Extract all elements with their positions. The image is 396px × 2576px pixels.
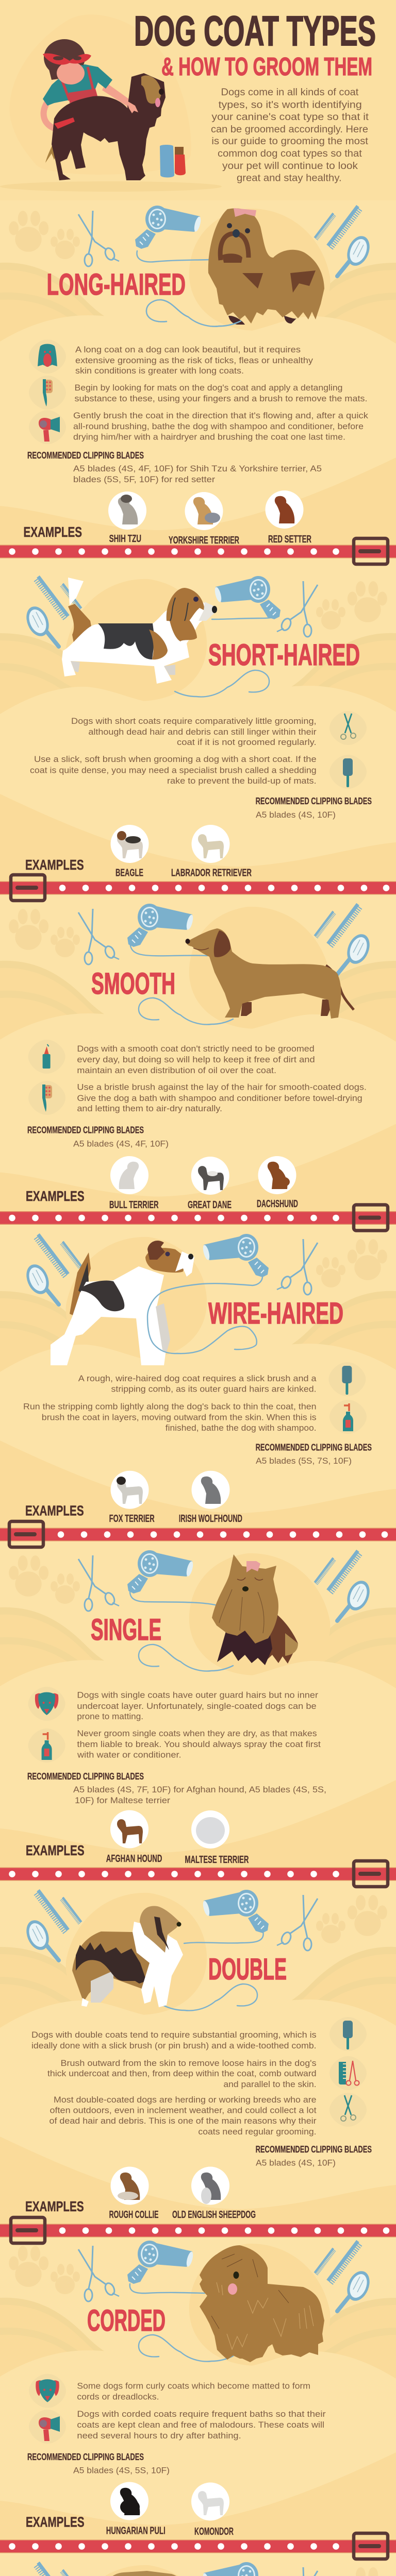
text: long-haired intro: A long coat on a dog can look beautiful, but it requires <box>75 345 301 354</box>
text: corded coat: Some dogs form curly coats which become matted to form <box>77 2381 310 2391</box>
text: single coat: prone to matting. <box>77 1711 143 1721</box>
icon: hairdryer <box>29 410 66 444</box>
text: wire-haired combing: A rough, wire-haired dog coat requires a slick brush and a <box>78 1374 317 1383</box>
clipping blades: single: RECOMMENDED CLIPPING BLADES <box>27 1771 144 1782</box>
text: smooth coat: maintain an even distribution of oil over the coat. <box>77 1065 276 1075</box>
clipping blades: smooth <box>27 1124 169 1149</box>
text: detangling: Begin by looking for mats on the dog's coat and apply a detangling <box>74 383 342 393</box>
panel: corded background <box>0 2244 396 2540</box>
intro text: your pet will continue to look <box>222 161 358 172</box>
intro text: types, so it's worth identifying <box>219 100 362 111</box>
text: long-haired intro: skin conditions is greater with long coats. <box>75 366 244 376</box>
text: smooth coat <box>77 1044 315 1075</box>
dog illustration: corded <box>200 2245 324 2362</box>
tools: single <box>9 1550 374 1671</box>
examples: long-haired: SHIH TZU <box>109 533 141 545</box>
text: short coat grooming: coat if it is not groomed regularly. <box>177 737 317 747</box>
header panel <box>0 0 396 200</box>
text: double coat: Dogs with double coats tend to require substantial grooming, which is <box>31 2030 317 2040</box>
text: long-haired intro <box>75 345 314 376</box>
text: brush outward: and parallel to the skin. <box>223 2079 317 2089</box>
examples: smooth: BULL TERRIER <box>109 1199 159 1211</box>
panel: woolly background <box>0 2565 396 2576</box>
intro text: Dogs come in all kinds of coat <box>221 87 359 98</box>
examples: wire-haired <box>25 1471 242 1524</box>
panel: single background <box>0 1553 396 1868</box>
text: smooth coat: every day, but doing so will help to keep it free of dirt and <box>77 1055 315 1064</box>
clipping blades: long-haired <box>27 450 322 484</box>
panel: short-haired background <box>0 579 396 882</box>
text: wire-haired combing: stripping comb, as its outer guard hairs are kinked. <box>111 1384 317 1394</box>
intro text: common dog coat types so that <box>218 148 362 159</box>
clipping blades: single: 10F) for Maltese terrier <box>75 1795 170 1805</box>
dryer cord <box>137 251 209 262</box>
lower cord: long-haired <box>146 300 241 327</box>
intro text <box>211 87 369 184</box>
text: brush outward <box>47 2058 317 2089</box>
text: brushing and drying <box>73 411 369 442</box>
tools: woolly <box>22 2562 387 2576</box>
examples: corded <box>26 2482 234 2537</box>
examples: double: OLD ENGLISH SHEEPDOG <box>172 2209 256 2221</box>
dog illustration: double collie <box>72 1906 183 2007</box>
icon: comb and scissors <box>329 2056 367 2090</box>
examples: single: AFGHAN HOUND <box>106 1853 162 1865</box>
text: frequent baths: need several hours to dry after bathing. <box>77 2431 241 2441</box>
text: spray first <box>77 1728 321 1760</box>
icon: spray bottle <box>28 1728 65 1762</box>
clipping blades: single <box>27 1771 326 1805</box>
examples: double: EXAMPLES <box>25 2198 84 2214</box>
text: working breeds: often outdoors, even in inclement weather, and could collect a lot <box>50 2105 317 2115</box>
clipping blades: smooth: A5 blades (4S, 4F, 10F) <box>73 1139 169 1149</box>
text: single coat <box>77 1690 318 1721</box>
text: working breeds: of dead hair and debris. This is one of the main reasons why their <box>50 2116 317 2126</box>
dryer cord <box>130 1591 217 1605</box>
tools: double <box>22 1890 387 2011</box>
text: short coat grooming: Dogs with short coats require comparatively little grooming, <box>71 716 317 726</box>
examples: wire-haired: IRISH WOLFHOUND <box>179 1513 242 1524</box>
icon: bristle brush <box>29 376 66 410</box>
icon: bristle brush <box>28 1081 65 1115</box>
icon: dog face <box>29 2374 66 2408</box>
text: corded coat: cords or dreadlocks. <box>77 2392 159 2402</box>
text: spray first: Never groom single coats when they are dry, as that makes <box>77 1728 317 1738</box>
clipping blades: double: A5 blades (4S, 10F) <box>256 2158 336 2168</box>
examples: single: EXAMPLES <box>26 1842 85 1858</box>
text: frequent baths: Dogs with corded coats require frequent baths so that their <box>77 2409 326 2419</box>
text: long-haired intro: extensive grooming as the risk of ticks, fleas or unhealthy <box>75 355 314 365</box>
examples: long-haired <box>24 490 311 546</box>
text: frequent baths <box>77 2409 326 2441</box>
examples: double <box>25 2167 256 2221</box>
text: brush outward: Brush outward from the skin to remove loose hairs in the dog's <box>61 2058 317 2068</box>
text: slick brush <box>30 754 317 786</box>
heading: long-haired: LONG-HAIRED <box>47 268 186 301</box>
clipping blades: smooth: RECOMMENDED CLIPPING BLADES <box>27 1124 144 1135</box>
text: brushing and drying: Gently brush the coat in the direction that it's flowing and, after a quick <box>73 411 369 420</box>
examples: long-haired: EXAMPLES <box>24 524 82 540</box>
examples: smooth: GREAT DANE <box>188 1199 232 1211</box>
examples: short-haired: BEAGLE <box>116 868 143 879</box>
clipping blades: short-haired: A5 blades (4S, 10F) <box>256 810 336 820</box>
examples: short-haired: LABRADOR RETRIEVER <box>171 868 252 879</box>
collar divider 1 <box>0 538 396 564</box>
text: bristle brush: and letting them to air-dry naturally. <box>77 1104 222 1113</box>
examples: smooth: DACHSHUND <box>257 1198 298 1210</box>
intro text: is our guide to grooming the most <box>211 136 369 147</box>
clipping blades: long-haired: A5 blades (4S, 4F, 10F) for Shih Tzu & Yorkshire terrier, A5 <box>73 464 322 473</box>
examples: wire-haired: EXAMPLES <box>25 1503 84 1519</box>
text: short coat grooming: although dead hair and debris can still linger within their <box>88 727 317 737</box>
text: stripping comb: brush the coat in layers, moving outward from the skin. When this is <box>42 1413 317 1422</box>
icon: scissors <box>329 711 367 745</box>
examples: long-haired: RED SETTER <box>268 534 311 545</box>
text: detangling: substance to these, using your fingers and a brush to remove the mats. <box>74 394 367 403</box>
examples: long-haired: YORKSHIRE TERRIER <box>169 535 239 546</box>
collar divider 7 <box>0 2533 396 2559</box>
examples: short-haired: EXAMPLES <box>25 857 84 873</box>
icon: dog face <box>28 1687 65 1721</box>
panel: long-haired background <box>0 209 396 546</box>
text: bristle brush <box>77 1082 367 1113</box>
examples: smooth: EXAMPLES <box>26 1188 85 1204</box>
icon: slick brush <box>328 1362 366 1396</box>
dryer cord <box>130 941 207 956</box>
icon: shampoo bottle <box>28 1040 65 1074</box>
intro text: can be groomed accordingly. Here <box>211 124 368 135</box>
examples: corded: KOMONDOR <box>194 2526 234 2537</box>
text: single coat: undercoat layer. Unfortunately, single-coated dogs can be <box>77 1701 317 1711</box>
tools: short-haired <box>22 576 387 697</box>
dog illustration: smooth dachshund <box>186 928 354 1019</box>
panel: smooth background <box>0 907 396 1212</box>
examples: smooth <box>26 1156 298 1211</box>
text: corded coat <box>77 2381 310 2402</box>
text: spray first: them liable to break. You should always spray the coat first <box>77 1739 321 1749</box>
collar divider 5 <box>0 1861 396 1887</box>
clipping blades: corded: RECOMMENDED CLIPPING BLADES <box>27 2451 144 2462</box>
text: double coat <box>31 2030 317 2050</box>
examples: single <box>26 1810 249 1866</box>
text: short coat grooming <box>71 716 317 747</box>
dog illustration: wire-haired fox terrier <box>51 1241 194 1365</box>
text: working breeds: coats need regular grooming. <box>198 2127 317 2137</box>
intro text: great and stay healthy. <box>237 173 342 184</box>
icon: long hair face <box>29 340 66 374</box>
intro text: your canine's coat type so that it <box>211 112 369 123</box>
collar divider 3 <box>0 1205 396 1230</box>
clipping blades: long-haired: RECOMMENDED CLIPPING BLADES <box>27 450 144 461</box>
text: stripping comb: finished, bathe the dog with shampoo. <box>166 1423 317 1433</box>
clipping blades: wire-haired <box>256 1442 372 1466</box>
text: smooth coat: Dogs with a smooth coat don't strictly need to be groomed <box>77 1044 315 1054</box>
examples: corded: HUNGARIAN PULI <box>106 2526 166 2537</box>
tools: long-haired <box>9 206 374 327</box>
dryer cord <box>212 609 278 619</box>
icon: slick brush <box>329 2017 367 2051</box>
header illustration: groomer and dog <box>43 39 186 180</box>
text: working breeds: Most double-coated dogs are herding or working breeds who are <box>54 2095 317 2105</box>
icon: hairdryer <box>29 2410 66 2444</box>
clipping blades: single: A5 blades (4S, 7F, 10F) for Afghan hound, A5 blades (4S, 5S, <box>73 1785 326 1794</box>
clipping blades: long-haired: blades (5S, 5F, 10F) for red setter <box>73 474 215 484</box>
clipping blades: corded <box>27 2451 170 2475</box>
text: frequent baths: coats are kept clean and free of malodours. These coats will <box>77 2420 324 2430</box>
heading: single: SINGLE <box>91 1613 161 1647</box>
examples: corded: EXAMPLES <box>26 2514 85 2530</box>
text: brushing and drying: all-round brushing, bathe the dog with shampoo and conditioner, before <box>73 421 364 431</box>
tools: wire-haired <box>22 1234 387 1304</box>
clipping blades: double <box>256 2144 372 2168</box>
heading: double: DOUBLE <box>208 1953 287 1986</box>
dog illustration: single yorkie <box>212 1554 298 1665</box>
dryer cord <box>130 2284 205 2293</box>
icon: slick brush <box>329 755 367 789</box>
text: working breeds <box>50 2095 317 2137</box>
dryer cord <box>184 1931 263 1943</box>
text: slick brush: rake to prevent the build-up of mats. <box>167 776 317 786</box>
examples: short-haired <box>25 825 252 879</box>
clipping blades: short-haired <box>256 795 372 820</box>
examples: wire-haired: FOX TERRIER <box>109 1513 155 1524</box>
text: bristle brush: Use a bristle brush against the lay of the hair for smooth-coated dogs. <box>77 1082 367 1092</box>
dog illustration: short-haired beagle <box>62 578 217 684</box>
text: stripping comb: Run the stripping comb lightly along the dog's back to thin the coat, then <box>23 1401 317 1412</box>
clipping blades: corded: A5 blades (4S, 5S, 10F) <box>73 2465 170 2475</box>
text: spray first: with water or conditioner. <box>77 1750 182 1760</box>
clipping blades: wire-haired: A5 blades (5S, 7S, 10F) <box>256 1456 352 1466</box>
heading: smooth: SMOOTH <box>91 967 175 1001</box>
collar divider 6 <box>0 2217 396 2243</box>
text: detangling <box>74 383 367 403</box>
tools: corded <box>9 2241 374 2362</box>
tools: smooth <box>9 904 374 1025</box>
text: bristle brush: Give the dog a bath with shampoo and conditioner before towel-drying <box>77 1093 362 1103</box>
text: single coat: Dogs with single coats have outer guard hairs but no inner <box>77 1690 318 1700</box>
panel: wire-haired background <box>0 1237 396 1529</box>
dog illustration: long-haired shih tzu <box>208 208 324 325</box>
text: slick brush: Use a slick, soft brush when grooming a dog with a short coat. If the <box>34 754 317 764</box>
collar divider 4 <box>0 1521 396 1547</box>
panel: double background <box>0 1893 396 2225</box>
examples: double: ROUGH COLLIE <box>109 2209 159 2221</box>
dog illustration: woolly <box>59 2571 194 2576</box>
text: brushing and drying: drying him/her with a hairdryer and brushing the coat one last time. <box>73 432 345 442</box>
text: wire-haired combing <box>78 1374 317 1394</box>
examples: single: MALTESE TERRIER <box>185 1854 249 1866</box>
text: stripping comb <box>23 1401 317 1433</box>
heading: corded: CORDED <box>87 2304 166 2337</box>
cord: wire-haired <box>147 1275 262 1353</box>
text: slick brush: coat is quite dense, you may need a specialist brush called a shedding <box>30 766 317 775</box>
text: brush outward: thick undercoat and then, from deep within the coat, comb outward <box>47 2069 317 2078</box>
icon: scissors <box>329 2093 367 2127</box>
icon: spray bottle <box>329 1400 367 1434</box>
text: double coat: ideally done with a slick brush (or pin brush) and a wide-toothed comb. <box>31 2041 317 2050</box>
collar divider 2 <box>0 875 396 901</box>
